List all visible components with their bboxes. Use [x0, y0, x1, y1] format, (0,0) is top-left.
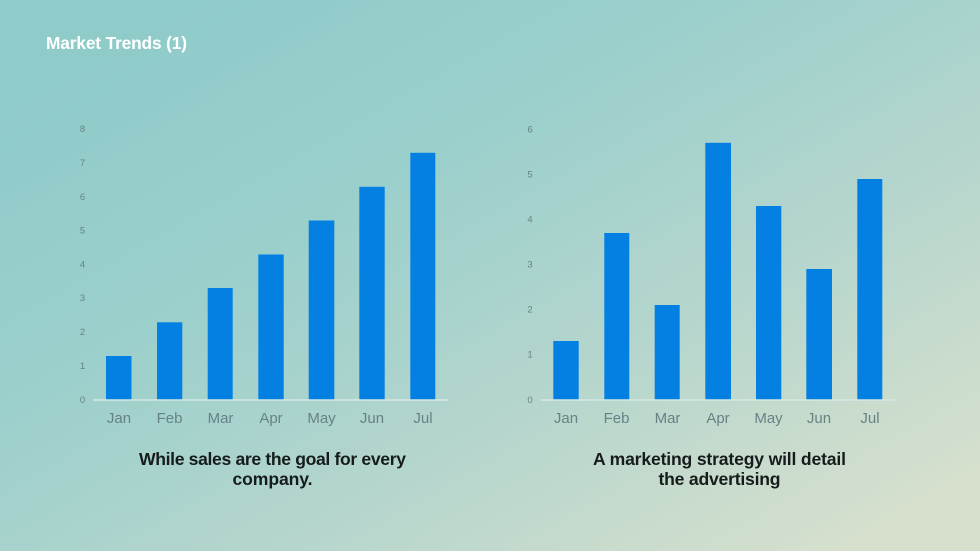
y axis labels: marketing: 5 [527, 170, 533, 180]
x axis labels: marketing [554, 410, 880, 427]
chart: marketing bar chart [527, 124, 895, 427]
y axis labels: sales: 6 [80, 192, 85, 203]
y axis labels: marketing: 6 [527, 124, 533, 136]
y axis labels: marketing: 4 [527, 214, 533, 226]
y axis labels: sales: 3 [80, 293, 85, 304]
x axis line: sales [93, 399, 448, 401]
x axis labels: marketing: Jan [554, 410, 578, 427]
x axis labels: sales: Mar [208, 410, 233, 427]
caption: marketing [593, 449, 846, 489]
y axis labels: marketing [527, 124, 533, 406]
x axis labels: marketing: Apr [706, 410, 730, 427]
bars: sales [106, 153, 435, 400]
x axis labels: sales: Feb [157, 410, 182, 427]
x axis labels: sales: Jul [413, 410, 433, 427]
y axis labels: sales: 2 [80, 327, 85, 338]
x axis line: marketing [541, 399, 895, 401]
x axis labels: marketing: May [754, 410, 783, 427]
x axis labels: sales: May [307, 410, 336, 427]
y axis labels: sales: 1 [80, 361, 85, 372]
bars: marketing [553, 143, 882, 400]
y axis labels: sales: 5 [80, 226, 85, 236]
y axis labels: marketing: 3 [527, 260, 533, 270]
x axis labels: sales: Apr [259, 410, 283, 427]
chart: sales bar chart [80, 124, 448, 427]
y axis labels: sales: 8 [80, 124, 85, 135]
caption: sales: While sales are the goal for every [139, 449, 406, 469]
y axis labels: sales: 0 [80, 395, 85, 406]
x axis labels: sales [107, 410, 433, 427]
x axis labels: marketing: Jul [860, 410, 880, 427]
caption: sales: company. [232, 469, 312, 489]
caption: marketing: the advertising [658, 469, 780, 489]
caption: marketing: A marketing strategy will detail [593, 449, 846, 469]
title: Market Trends (1) [46, 33, 187, 53]
y axis labels: sales [80, 124, 85, 406]
y axis labels: sales: 7 [80, 158, 85, 169]
x axis labels: sales: Jun [360, 410, 384, 427]
y axis labels: marketing: 1 [527, 350, 533, 360]
x axis labels: marketing: Feb [604, 410, 629, 427]
y axis labels: sales: 4 [80, 260, 85, 270]
x axis labels: marketing: Jun [807, 410, 831, 427]
x axis labels: sales: Jan [107, 410, 131, 427]
x axis labels: marketing: Mar [655, 410, 680, 427]
y axis labels: marketing: 2 [527, 304, 533, 316]
y axis labels: marketing: 0 [527, 395, 533, 406]
caption: sales [139, 449, 406, 489]
